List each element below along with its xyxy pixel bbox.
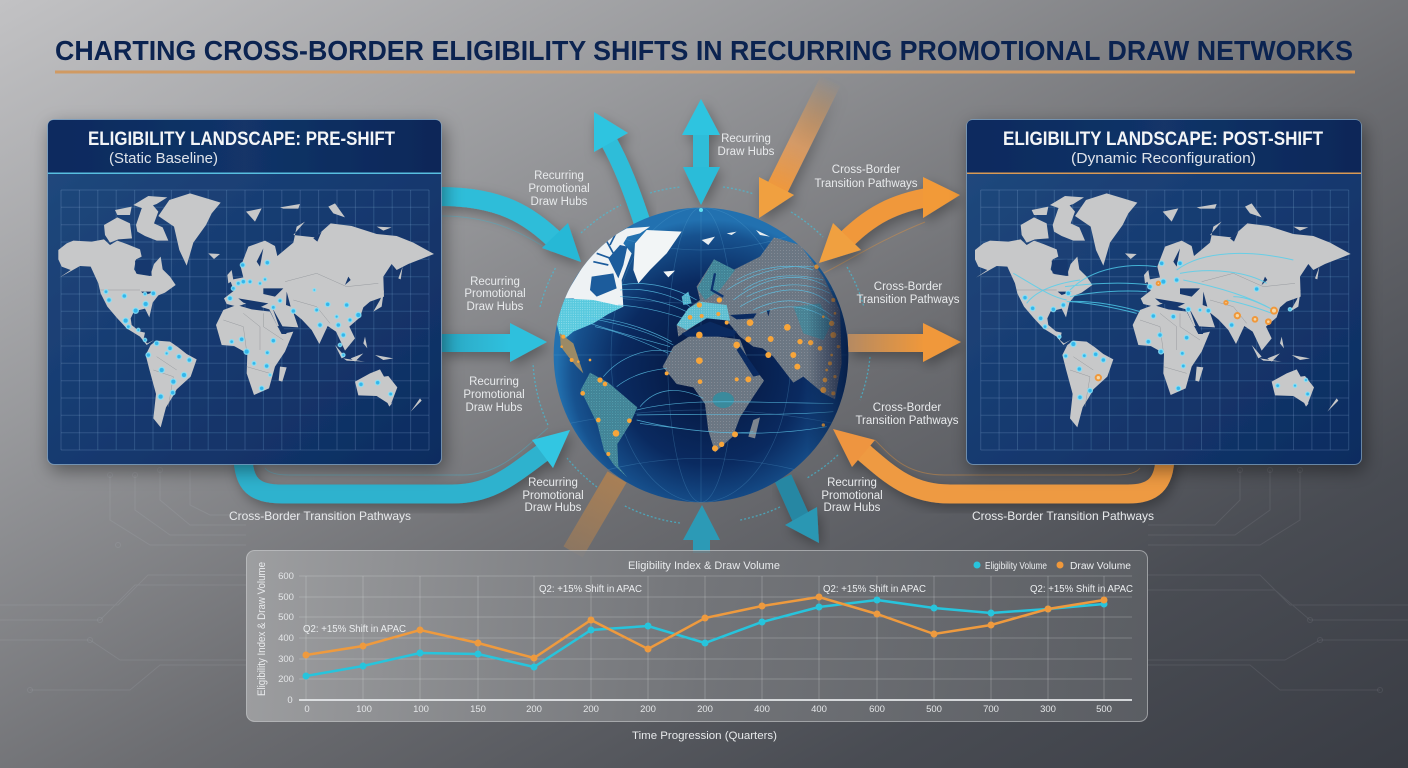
- world map with hub markers: [58, 193, 434, 427]
- arrow: pre-shift panel to globe, lower: [243, 430, 570, 494]
- arrow: post-shift panel to globe, lower: [833, 429, 1165, 494]
- globe: dark right limb: [554, 208, 848, 502]
- panel heading: ELIGIBILITY LANDSCAPE: POST-SHIFT: [1003, 129, 1323, 150]
- arrow: upward curved from globe: [594, 112, 642, 222]
- annotation: first: Q2: +15% Shift in APAC: [303, 624, 406, 635]
- globe: Eurasia: [677, 237, 842, 399]
- label: hubs upper left: Promotional: [528, 183, 590, 195]
- title underline: [55, 70, 1355, 74]
- arrow: pre-shift panel to globe, middle: [440, 323, 547, 362]
- header divider: [967, 172, 1361, 174]
- circuit traces: left: [0, 468, 246, 692]
- panel: post-shift landscape: [966, 120, 1362, 464]
- label: hubs bottom left: Promotional: [522, 490, 584, 502]
- label: pathways right: Cross-Border: [874, 281, 942, 293]
- annotation: fourth: Q2: +15% Shift in APAC: [1030, 584, 1133, 595]
- x axis ticks: 500: [926, 704, 942, 715]
- arrow: vertical double-headed: [682, 99, 720, 205]
- x axis ticks: 100: [356, 704, 372, 715]
- label: hubs bottom left: Draw Hubs: [525, 502, 582, 514]
- thin pathway lines: [265, 216, 1140, 475]
- globe: graticule: [554, 208, 848, 502]
- panel: pre-shift landscape: [48, 120, 442, 464]
- map grid: [981, 190, 1349, 450]
- label: hubs bottom left: Recurring: [528, 477, 578, 489]
- label: pathways upper right: Cross-Border: [832, 164, 900, 176]
- globe: South America: [581, 373, 637, 477]
- globe: arctic channels: [593, 234, 616, 266]
- annotation: third: Q2: +15% Shift in APAC: [823, 584, 926, 595]
- label: pathways lower right: Cross-Border: [873, 402, 941, 414]
- label: hubs upper left: Recurring: [534, 170, 584, 182]
- panel body: [48, 120, 442, 464]
- y axis ticks: [278, 571, 294, 706]
- label: hubs left: Promotional: [464, 288, 526, 300]
- x axis ticks: 600: [869, 704, 885, 715]
- x axis ticks: 0: [304, 704, 310, 715]
- y axis ticks: 500: [278, 592, 294, 603]
- globe: North America cyan lower: [557, 298, 623, 340]
- label: hubs top: Draw Hubs: [718, 146, 775, 158]
- y axis ticks: 200: [278, 674, 294, 685]
- globe: Greenland: [633, 230, 682, 283]
- arrow: teal down-right: [783, 478, 819, 543]
- legend: Draw Volume: [1070, 561, 1131, 572]
- dotted orbit arcs around globe: [533, 187, 870, 523]
- x axis ticks: 100: [413, 704, 429, 715]
- y axis ticks: 500: [278, 612, 294, 623]
- globe: Hudson Bay and channels: [590, 245, 627, 297]
- globe: Africa: [663, 333, 764, 452]
- y axis ticks: 600: [278, 571, 294, 582]
- chart grid: [299, 576, 1132, 700]
- title: CHARTING CROSS-BORDER ELIGIBILITY SHIFTS IN RECURRING PROMOTIONAL DRAW NETWORKS: [55, 35, 1353, 66]
- arrow: orange fading from top: [759, 80, 831, 218]
- flow labels: [229, 133, 1154, 523]
- x axis ticks: 200: [640, 704, 656, 715]
- globe: Central America: [560, 333, 583, 373]
- y axis ticks: 400: [278, 633, 294, 644]
- panel header: [48, 120, 441, 173]
- globe: North America: [563, 227, 650, 315]
- chart baseline: [299, 699, 1132, 701]
- x axis ticks: 200: [697, 704, 713, 715]
- arrow: pre-shift panel to globe, upper: [440, 196, 581, 262]
- x axis ticks: 150: [470, 704, 486, 715]
- label: hubs lower left: Promotional: [463, 389, 525, 401]
- label: pathways upper right: Transition Pathways: [814, 178, 918, 190]
- x axis ticks: [304, 704, 1112, 715]
- globe: Asia teal network: [793, 303, 832, 340]
- series: draw volume: [302, 594, 1108, 662]
- label: pathways bottom left: Cross-Border Transition Pathways: [229, 509, 411, 523]
- label: hubs upper left: Draw Hubs: [531, 196, 588, 208]
- x axis ticks: 500: [1096, 704, 1112, 715]
- globe: top marker: [699, 208, 703, 212]
- globe: Africa interior basin: [713, 392, 734, 408]
- panel header: [967, 120, 1361, 173]
- x axis ticks: 400: [754, 704, 770, 715]
- panel: line chart: [246, 550, 1148, 722]
- globe: Madagascar: [748, 417, 760, 438]
- series: eligibility volume: [302, 596, 1108, 680]
- circuit traces: right: [1148, 468, 1408, 692]
- label: pathways right: Transition Pathways: [856, 294, 960, 306]
- panel body: [966, 120, 1362, 464]
- x axis ticks: 700: [983, 704, 999, 715]
- label: hubs top: Recurring: [721, 133, 771, 145]
- globe: Baltic: [712, 273, 723, 297]
- x axis ticks: 200: [526, 704, 542, 715]
- label: hubs left: Recurring: [470, 276, 520, 288]
- globe: islands: [702, 230, 770, 245]
- y axis title: Eligibility Index & Draw Volume: [256, 562, 268, 696]
- x axis ticks: 300: [1040, 704, 1056, 715]
- chart title: Eligibility Index & Draw Volume: [628, 560, 780, 572]
- panel subheading: (Static Baseline): [109, 150, 218, 167]
- globe: Mediterranean and seas: [682, 310, 770, 377]
- label: pathways lower right: Transition Pathways: [855, 415, 959, 427]
- globe: orange hub dots: [560, 264, 840, 456]
- world map with routes and hub markers: [975, 193, 1351, 427]
- label: pathways bottom right: Cross-Border Transition Pathways: [972, 509, 1154, 523]
- x axis ticks: 400: [811, 704, 827, 715]
- arrow: tan faded band: [573, 477, 617, 552]
- y axis ticks: 300: [278, 654, 294, 665]
- label: hubs bottom right: Draw Hubs: [824, 502, 881, 514]
- label: hubs left: Draw Hubs: [467, 301, 524, 313]
- header divider: [48, 172, 441, 174]
- legend: Eligibility Volume: [985, 561, 1047, 572]
- x axis title: Time Progression (Quarters): [632, 730, 777, 742]
- label: hubs lower left: Recurring: [469, 376, 519, 388]
- globe: Europe cyan: [677, 292, 730, 330]
- globe: route lines: [583, 266, 835, 433]
- label: hubs bottom right: Recurring: [827, 477, 877, 489]
- map grid: [61, 190, 429, 450]
- y axis ticks: 0: [287, 695, 293, 706]
- panel heading: ELIGIBILITY LANDSCAPE: PRE-SHIFT: [88, 129, 395, 150]
- label: hubs bottom right: Promotional: [821, 490, 883, 502]
- legend: [974, 561, 1131, 572]
- arrow: globe to post-shift panel, middle: [848, 323, 961, 362]
- x axis ticks: 200: [583, 704, 599, 715]
- panel subheading: (Dynamic Reconfiguration): [1071, 150, 1256, 167]
- chart background: [246, 550, 1148, 722]
- arrow: orange double-headed: [819, 177, 960, 263]
- annotation: second: Q2: +15% Shift in APAC: [539, 584, 642, 595]
- globe: Scandinavia teal: [697, 259, 735, 300]
- label: hubs lower left: Draw Hubs: [466, 402, 523, 414]
- globe: [554, 208, 848, 502]
- arrow: bottom teal upward: [683, 505, 720, 553]
